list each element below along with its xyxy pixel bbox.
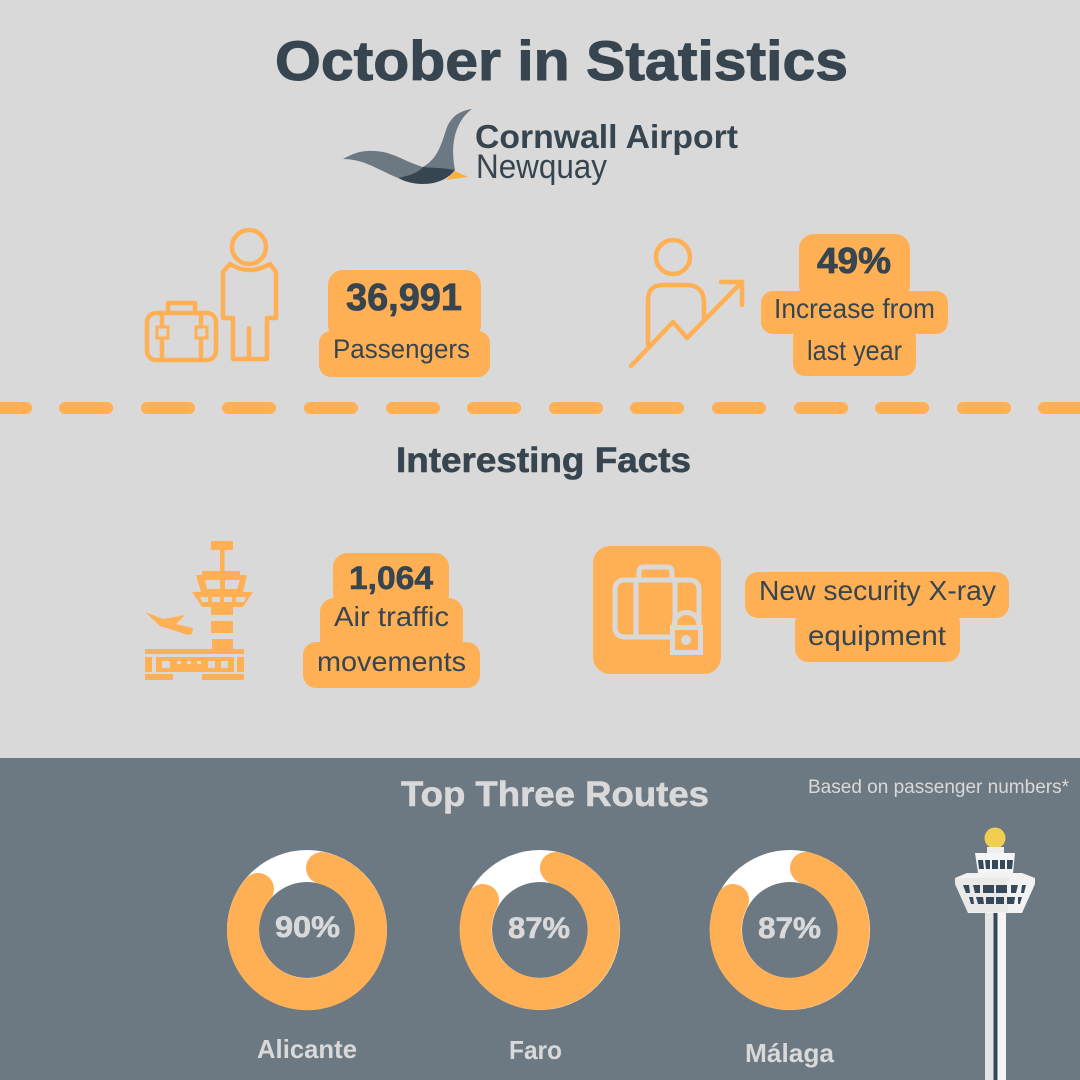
stat: 49% increase from last year: 49% bbox=[817, 240, 891, 281]
label: Alicante: Alicante bbox=[257, 1034, 357, 1064]
fact: new security x-ray equipment: equipment bbox=[808, 620, 946, 651]
donut: Faro 87% bbox=[476, 866, 604, 994]
stat: 36,991 passengers: Passengers bbox=[333, 334, 470, 364]
fact: new security x-ray equipment: New security X-ray bbox=[759, 575, 996, 606]
donut: Málaga 87% bbox=[726, 866, 854, 994]
donut: Faro 87%: 87% bbox=[508, 912, 570, 945]
stat: 49% increase from last year bbox=[761, 234, 948, 376]
title: October in Statistics bbox=[275, 29, 848, 92]
icon: locked suitcase bbox=[593, 546, 721, 674]
stat: 1,064 air traffic movements: movements bbox=[317, 646, 466, 677]
logo: Cornwall Airport Newquay bbox=[343, 109, 738, 186]
donut: Málaga 87%: 87% bbox=[758, 912, 821, 945]
stat: 49% increase from last year: last year bbox=[807, 335, 902, 366]
icon: passenger with suitcase bbox=[147, 230, 276, 360]
fact: new security x-ray equipment bbox=[745, 572, 1009, 662]
stat: 1,064 air traffic movements: 1,064 bbox=[349, 560, 433, 596]
panel: top three routes bbox=[0, 758, 1080, 1080]
label: Faro: Faro bbox=[509, 1035, 562, 1065]
illustration: airport control tower bbox=[955, 828, 1035, 1080]
stat: 1,064 air traffic movements: Air traffic bbox=[334, 601, 449, 632]
stat: 36,991 passengers: 36,991 bbox=[346, 277, 462, 319]
stat: 1,064 air traffic movements bbox=[303, 553, 480, 688]
icon: control tower and plane bbox=[145, 541, 253, 680]
donut: Alicante 90%: 90% bbox=[275, 911, 340, 944]
stat: 36,991 passengers bbox=[319, 270, 490, 377]
logo: Cornwall Airport Newquay: Newquay bbox=[476, 148, 607, 186]
heading: Interesting Facts: Interesting Facts bbox=[396, 441, 691, 480]
stat: 49% increase from last year: Increase from bbox=[774, 293, 935, 324]
heading: Top Three Routes: Top Three Routes bbox=[401, 775, 709, 814]
icon: person with rising arrow bbox=[631, 240, 742, 366]
logo: Cornwall Airport Newquay: Cornwall Airport bbox=[475, 118, 738, 155]
note: based on passenger numbers: Based on passenger numbers* bbox=[808, 777, 1070, 798]
label: Málaga: Málaga bbox=[745, 1038, 835, 1068]
dashed divider bbox=[0, 402, 1080, 414]
donut: Alicante 90% bbox=[243, 866, 371, 994]
